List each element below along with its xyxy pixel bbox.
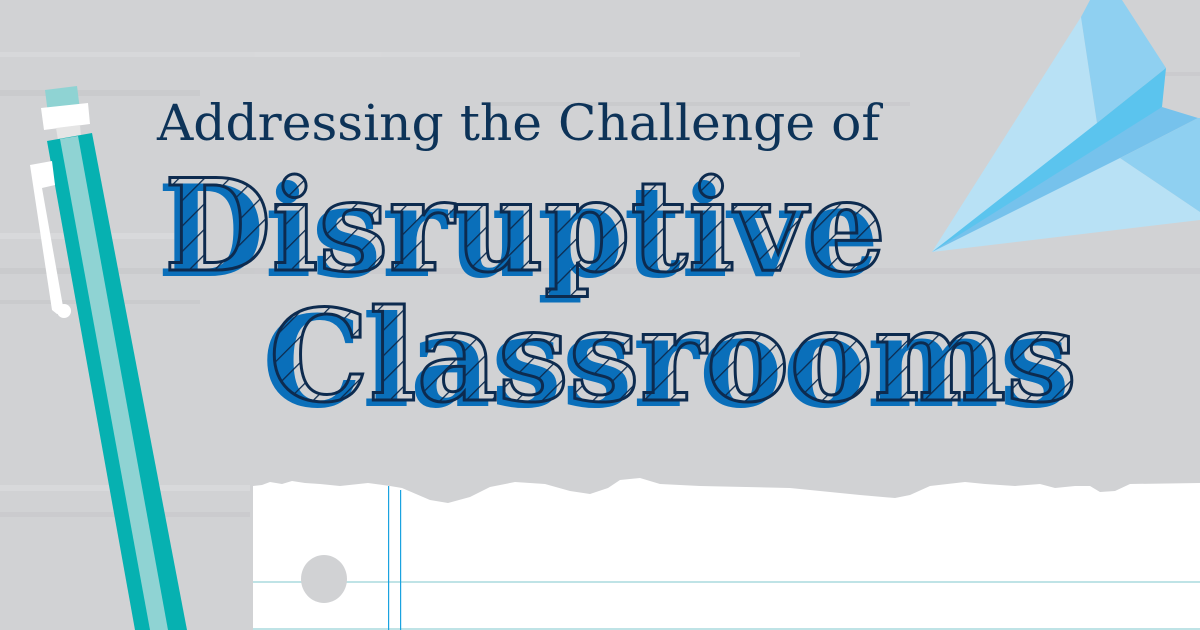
background streaks [0,52,1200,517]
title: Addressing the Challenge of: Addressing the Challenge of [156,94,884,152]
paper plane [932,0,1200,252]
heading: Classrooms: Classrooms [269,282,1077,430]
pen [30,86,187,630]
heading: Disruptive: Disruptive [157,158,879,306]
heading: Classrooms: Classrooms [262,288,1070,436]
paper sheet [253,478,1200,630]
heading: Disruptive: Disruptive [164,152,886,300]
